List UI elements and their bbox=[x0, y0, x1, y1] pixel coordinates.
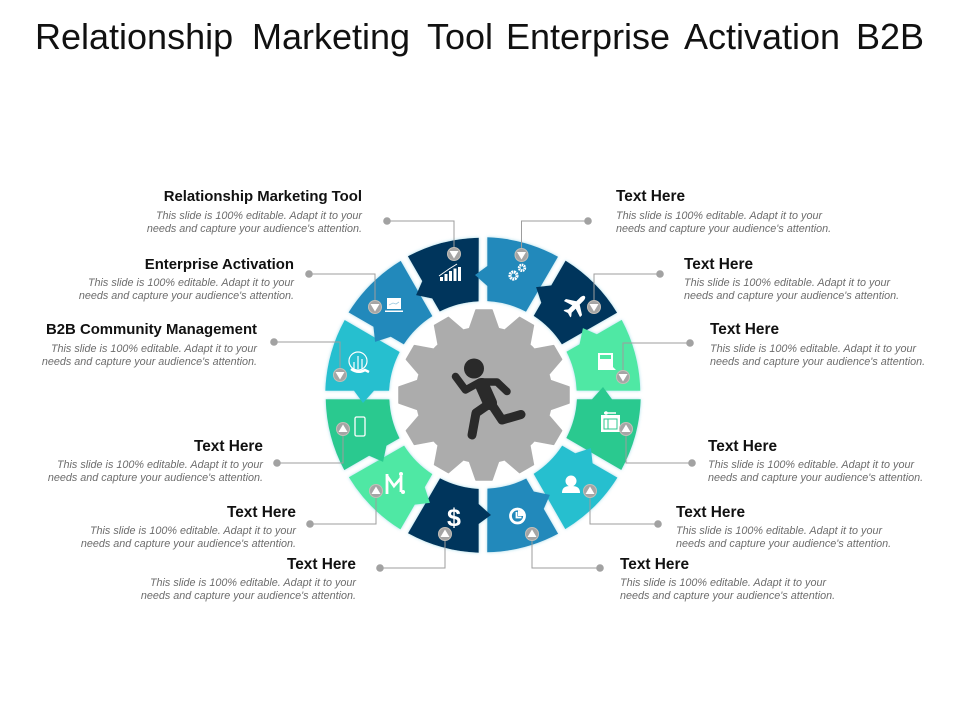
text block: left 5: needs and capture your audience's attention. bbox=[81, 538, 296, 550]
text block: right 5: needs and capture your audience's attention. bbox=[676, 538, 891, 550]
text block: right 6: Text Here bbox=[620, 556, 689, 573]
text block: right 4: This slide is 100% editable. Adapt it to your bbox=[708, 459, 914, 471]
text block: left 4: Text Here bbox=[194, 438, 263, 455]
text block: right 6: This slide is 100% editable. Adapt it to your bbox=[620, 577, 826, 589]
icon: magnifier chart bbox=[349, 352, 369, 372]
title: Tool bbox=[427, 16, 493, 57]
connector: Relationship Marketing Tool bbox=[383, 217, 460, 260]
icon: floppy disk bbox=[598, 353, 616, 370]
segment 5 bbox=[518, 430, 624, 539]
title: Relationship bbox=[35, 16, 233, 57]
text block: right 1: This slide is 100% editable. Adapt it to your bbox=[616, 210, 822, 222]
text block: Relationship Marketing Tool: Relationship Marketing Tool bbox=[164, 189, 362, 205]
text block: left 6: This slide is 100% editable. Adapt it to your bbox=[150, 577, 356, 589]
text block: B2B Community Management: B2B Community Management bbox=[46, 322, 257, 338]
connector: right 5 bbox=[584, 484, 662, 528]
text block: right 3: This slide is 100% editable. Adapt it to your bbox=[710, 343, 916, 355]
text block: Enterprise Activation: needs and capture your audience's attention. bbox=[79, 290, 294, 302]
text block: left 4: This slide is 100% editable. Adapt it to your bbox=[57, 459, 263, 471]
connector: B2B Community Management bbox=[270, 338, 346, 382]
title: Enterprise bbox=[506, 16, 670, 57]
text block: right 2: Text Here bbox=[684, 256, 753, 273]
icon: mobile phone bbox=[355, 417, 365, 436]
text block: left 5: Text Here bbox=[227, 504, 296, 521]
text block: right 5: This slide is 100% editable. Adapt it to your bbox=[676, 525, 882, 537]
text block: right 3: Text Here bbox=[710, 321, 779, 338]
icon: pie chart bbox=[510, 509, 524, 523]
central gear bbox=[399, 310, 569, 480]
icon: bar chart growth bbox=[439, 264, 461, 281]
segment 1 bbox=[475, 237, 558, 312]
icon: briefcase box bbox=[601, 411, 620, 432]
segment 8 bbox=[339, 430, 448, 536]
connector: right 3 bbox=[616, 339, 694, 384]
connector: right 1 bbox=[515, 217, 592, 262]
title: Marketing bbox=[252, 16, 410, 57]
text block: left 6 bbox=[141, 556, 356, 602]
text block: right 2 bbox=[684, 256, 899, 302]
text block: left 6: Text Here bbox=[287, 556, 356, 573]
arrow tab of segment 1 bbox=[475, 266, 488, 286]
icon: airplane bbox=[559, 288, 593, 322]
segment 2 bbox=[518, 254, 627, 360]
icon: running person bbox=[456, 358, 521, 435]
connector: left 5 bbox=[306, 484, 382, 528]
text block: left 5: This slide is 100% editable. Adapt it to your bbox=[90, 525, 296, 537]
title: B2B bbox=[856, 16, 924, 57]
connector: right 6 bbox=[526, 528, 604, 572]
segment 3 bbox=[551, 309, 657, 418]
text block: right 2: needs and capture your audience's attention. bbox=[684, 290, 899, 302]
text block: B2B Community Management: needs and capture your audience's attention. bbox=[42, 356, 257, 368]
text block: left 4: needs and capture your audience's attention. bbox=[48, 472, 263, 484]
icon: handshake figures bbox=[387, 472, 405, 494]
segment 12 bbox=[397, 221, 506, 327]
segment 10 bbox=[325, 320, 400, 403]
connector: left 6 bbox=[376, 528, 452, 572]
text block: right 1: Text Here bbox=[616, 188, 685, 205]
text block: Enterprise Activation bbox=[79, 257, 294, 302]
icon: dollar: $ bbox=[447, 504, 461, 532]
text block: right 6 bbox=[620, 556, 835, 602]
segment 9 bbox=[309, 372, 415, 481]
text block: right 4: Text Here bbox=[708, 438, 777, 455]
icon: laptop bbox=[385, 298, 403, 312]
text block: right 2: This slide is 100% editable. Adapt it to your bbox=[684, 277, 890, 289]
segment 4 bbox=[566, 387, 641, 470]
text block: right 5 bbox=[676, 504, 891, 550]
text block: Relationship Marketing Tool: needs and capture your audience's attention. bbox=[147, 223, 362, 235]
icon: gears bbox=[510, 265, 525, 279]
text block: right 4 bbox=[708, 438, 923, 484]
connector: right 2 bbox=[588, 270, 664, 314]
segment 7 bbox=[408, 478, 491, 553]
title: Activation bbox=[684, 16, 840, 57]
text block: B2B Community Management: This slide is 100% editable. Adapt it to your bbox=[51, 343, 257, 355]
text block: right 4: needs and capture your audience's attention. bbox=[708, 472, 923, 484]
text block: Relationship Marketing Tool: This slide is 100% editable. Adapt it to your bbox=[156, 210, 362, 222]
connector: Enterprise Activation bbox=[305, 270, 382, 314]
text block: Relationship Marketing Tool bbox=[147, 189, 362, 235]
text block: right 3 bbox=[710, 321, 925, 368]
connector: right 4 bbox=[620, 422, 696, 467]
text block: left 5 bbox=[81, 504, 296, 550]
connector: left 4 bbox=[273, 422, 350, 467]
segment 11 bbox=[342, 251, 448, 360]
text block: Enterprise Activation: This slide is 100% editable. Adapt it to your bbox=[88, 277, 294, 289]
text block: right 3: needs and capture your audience's attention. bbox=[710, 356, 925, 368]
text block: right 6: needs and capture your audience's attention. bbox=[620, 590, 835, 602]
text block: left 6: needs and capture your audience's attention. bbox=[141, 590, 356, 602]
text block: right 1 bbox=[616, 188, 831, 235]
segment 6 bbox=[460, 463, 569, 569]
icon: person bbox=[562, 476, 580, 493]
text block: B2B Community Management bbox=[42, 322, 257, 368]
text block: left 4 bbox=[48, 438, 263, 484]
text block: right 1: needs and capture your audience's attention. bbox=[616, 223, 831, 235]
segmented ring bbox=[309, 221, 657, 569]
text block: right 5: Text Here bbox=[676, 504, 745, 521]
text block: Enterprise Activation: Enterprise Activation bbox=[145, 257, 294, 273]
